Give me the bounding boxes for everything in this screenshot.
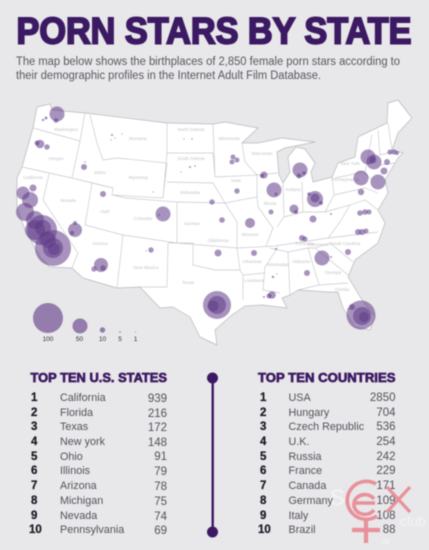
panel: top ten U.S. states: 79	[154, 466, 167, 478]
state labels: Florida	[335, 287, 349, 292]
panel: top ten U.S. states: 2	[31, 407, 37, 419]
state labels: Louisiana	[244, 278, 264, 283]
state labels: Arizona	[92, 241, 108, 246]
panel: top ten U.S. states: 216	[148, 408, 167, 420]
panel: top ten countries: 108	[376, 510, 396, 522]
panel: top ten U.S. states: 172	[148, 422, 167, 434]
panel: top ten countries: 3	[260, 421, 266, 433]
state labels: Kansas	[184, 221, 200, 226]
state labels: Tennessee	[307, 242, 330, 247]
legend: bubble sizes: 50	[76, 336, 83, 343]
panel: top ten U.S. states: 8	[31, 495, 38, 507]
subtitle text: The map below shows the birthplaces of 2,850 female porn stars according to	[16, 56, 400, 68]
state labels: Montana	[129, 136, 147, 141]
panel: top ten countries: Canada	[288, 480, 326, 492]
subtitle text	[16, 56, 400, 82]
legend: bubble sizes	[33, 303, 138, 343]
panel: top ten countries: U.K.	[288, 436, 310, 448]
panel: top ten U.S. states: 939	[148, 393, 167, 405]
legend: bubble sizes: 5	[118, 336, 122, 343]
panel: top ten countries: 10	[258, 524, 271, 536]
state labels: Utah	[100, 209, 110, 214]
panel: top ten countries: France	[288, 465, 322, 477]
panel: top ten countries: 704	[376, 407, 396, 419]
legend: bubble sizes: 1	[134, 336, 138, 343]
panel: top ten U.S. states: New york	[60, 436, 106, 448]
state labels: Missouri	[241, 232, 259, 237]
panel: top ten countries: USA	[288, 392, 311, 404]
panel: top ten U.S. states: 4	[31, 436, 38, 448]
panel: top ten U.S. states: 78	[154, 481, 167, 493]
panel: top ten U.S. states: 10	[29, 524, 42, 536]
panel: top ten U.S. states: 69	[154, 525, 167, 537]
panel: top ten countries: 5	[260, 451, 267, 463]
state labels: Indiana	[285, 187, 301, 192]
panel: top ten countries: 88	[383, 524, 396, 536]
watermark logo: club	[400, 513, 426, 529]
legend: bubble sizes: 100	[43, 336, 54, 343]
state labels: Nevada	[60, 198, 76, 203]
state labels: Georgia	[325, 270, 342, 275]
state labels: Oregon	[48, 156, 64, 161]
state labels	[23, 127, 361, 292]
panel: top ten countries: 229	[376, 465, 396, 477]
panel: top ten countries: 8	[260, 495, 267, 507]
panel: top ten countries: Hungary	[288, 407, 330, 419]
state labels: Iowa	[231, 178, 241, 183]
state labels: South Carolina	[330, 241, 361, 246]
panel: top ten countries: 2850	[370, 392, 396, 404]
panel: top ten countries: 171	[376, 480, 396, 492]
panel: top ten U.S. states: Florida	[60, 407, 93, 419]
US map	[16, 100, 412, 345]
panel: top ten U.S. states: California	[60, 392, 106, 404]
state labels: California	[23, 175, 43, 180]
state labels: Arkansas	[242, 259, 262, 264]
state labels: Wyoming	[128, 175, 148, 180]
data bubbles	[16, 106, 399, 330]
panel: top ten countries: Germany	[288, 495, 334, 507]
panel: top ten U.S. states: Illinois	[60, 465, 91, 477]
panel: top ten countries: 4	[260, 436, 267, 448]
panel: top ten U.S. states: 75	[154, 496, 167, 508]
state labels: Colorado	[134, 216, 153, 221]
panel: top ten U.S. states: Pennsylvania	[60, 524, 124, 536]
panel: top ten U.S. states: 74	[154, 511, 168, 523]
state labels: Texas	[182, 280, 195, 285]
panel: top ten U.S. states: Nevada	[60, 510, 97, 522]
panel: top ten countries: Italy	[288, 510, 309, 522]
watermark logo: .ar	[380, 536, 391, 546]
panel: top ten U.S. states: Ohio	[60, 451, 83, 463]
panel: top ten countries: Czech Republic	[288, 421, 365, 433]
panel: top ten countries: 242	[376, 451, 396, 463]
panel: top ten U.S. states: 91	[154, 451, 167, 463]
panel: top ten U.S. states: Arizona	[60, 480, 97, 492]
heading: top ten states: TOP TEN U.S. STATES	[30, 370, 167, 385]
subtitle text: their demographic profiles in the Internet Adult Film Database.	[16, 70, 321, 82]
panel: top ten U.S. states	[29, 370, 168, 537]
state labels: Idaho	[94, 170, 106, 175]
panel: top ten countries	[258, 370, 396, 536]
state labels: Alabama	[292, 259, 311, 264]
panel: top ten U.S. states: 5	[31, 451, 38, 463]
panel: top ten U.S. states: Michigan	[60, 495, 103, 507]
state labels: Minnesota	[218, 136, 240, 141]
panel: top ten countries: 109	[376, 495, 396, 507]
panel: top ten U.S. states: 1	[31, 392, 38, 404]
state labels: South Dakota	[177, 156, 205, 161]
panel: top ten countries: 2	[260, 407, 266, 419]
watermark logo	[330, 479, 426, 546]
panel: top ten countries: Russia	[288, 451, 322, 463]
panel: top ten U.S. states: 3	[31, 421, 37, 433]
panel: top ten U.S. states: 7	[31, 480, 37, 492]
panel: top ten U.S. states: 6	[31, 465, 37, 477]
state labels: Illinois	[264, 201, 277, 206]
legend: bubble sizes: 10	[99, 336, 106, 343]
panel: top ten countries: 1	[260, 392, 267, 404]
state labels: Mississippi	[267, 262, 289, 267]
panel: top ten countries: 254	[376, 436, 396, 448]
panel: top ten countries: 536	[376, 421, 396, 433]
state labels: Pennsylvania	[331, 177, 359, 182]
state labels: North Dakota	[177, 127, 205, 132]
state labels: Wisconsin	[252, 151, 273, 156]
divider line with end dots	[207, 372, 218, 538]
state labels: Washington	[54, 127, 78, 132]
panel: top ten U.S. states: 9	[31, 510, 37, 522]
state labels: Kentucky	[296, 241, 315, 246]
panel: top ten countries: Brazil	[288, 524, 316, 536]
state labels: Nebraska	[180, 190, 200, 195]
state labels: New York	[340, 161, 360, 166]
heading: top ten countries: TOP TEN COUNTRIES	[258, 370, 396, 385]
panel: top ten countries: 6	[260, 465, 266, 477]
watermark logo: s	[330, 479, 345, 512]
panel: top ten U.S. states: Texas	[60, 421, 89, 433]
panel: top ten countries: 7	[260, 480, 266, 492]
state labels: Oklahoma	[208, 238, 229, 243]
panel: top ten U.S. states: 148	[148, 437, 167, 449]
panel: top ten countries: 9	[260, 510, 266, 522]
state labels: New Mexico	[133, 265, 159, 270]
